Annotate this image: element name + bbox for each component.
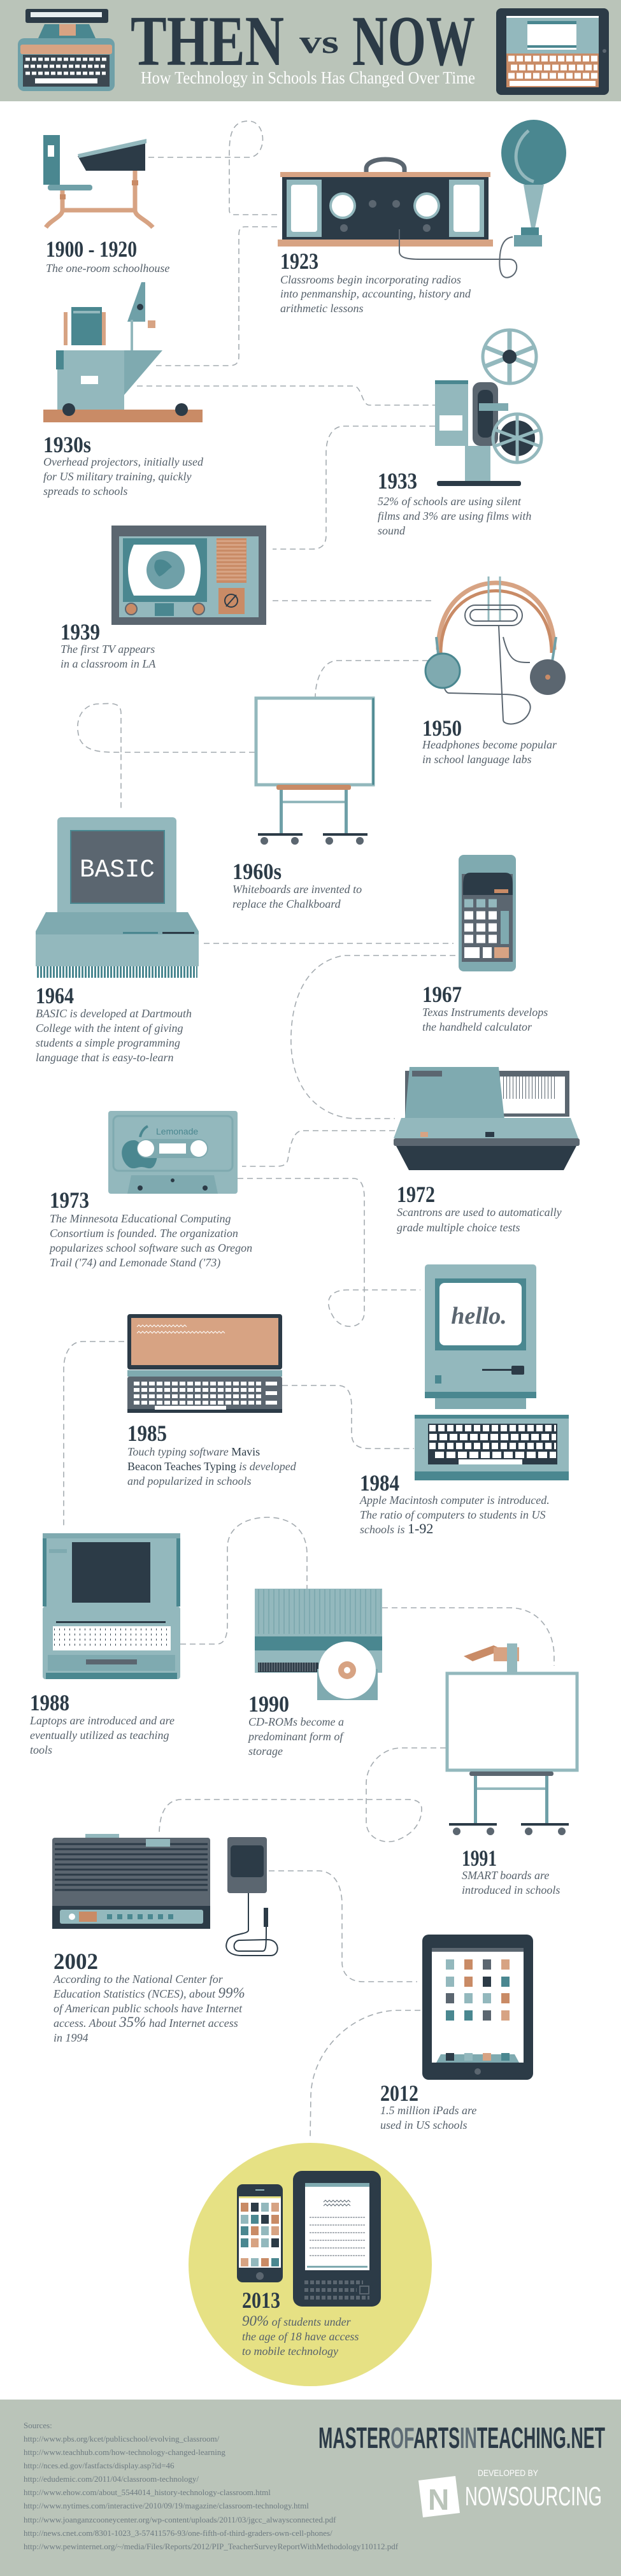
year 1967: 1967 bbox=[422, 982, 462, 1007]
icon: iPad bbox=[422, 1935, 533, 2080]
year 1991: 1991 bbox=[462, 1845, 497, 1871]
icon: 1988 laptop bbox=[43, 1533, 180, 1679]
year 1964: language that is easy-to-learn bbox=[36, 1051, 173, 1064]
year 1900-1920: The one-room schoolhouse bbox=[46, 262, 169, 275]
year 1973: The Minnesota Educational Computing bbox=[50, 1212, 231, 1225]
icon: tablet with keyboard bbox=[496, 8, 609, 95]
year 1933: 52% of schools are using silent bbox=[378, 495, 522, 508]
icon: film projector bbox=[435, 330, 541, 486]
icon: smartphone bbox=[237, 2184, 283, 2282]
sources list: http://nces.ed.gov/fastfacts/display.asp?id=46 bbox=[24, 2461, 175, 2470]
year 2012: 1.5 million iPads are bbox=[380, 2104, 476, 2117]
panel: 2013 mobile circle bbox=[189, 2143, 432, 2386]
icon: BASIC computer: BASIC bbox=[80, 856, 155, 885]
header band bbox=[0, 0, 621, 101]
title: THEN bbox=[131, 2, 284, 81]
sources list: http://www.joanganzcooneycenter.org/wp-content/uploads/2011/03/jgcc_alwaysconnected.pdf bbox=[24, 2515, 336, 2524]
year 1923: into penmanship, accounting, history and bbox=[280, 287, 471, 300]
year 1984: 1984 bbox=[360, 1470, 399, 1496]
connector paths bbox=[64, 121, 554, 2138]
year 1990: CD-ROMs become a bbox=[248, 1715, 344, 1728]
year 1939: in a classroom in LA bbox=[61, 657, 156, 670]
year 1950: Headphones become popular bbox=[422, 738, 557, 751]
year 2002: Education Statistics (NCES), about 99% bbox=[53, 1985, 245, 2001]
sources list: http://www.teachhub.com/how-technology-changed-learning bbox=[24, 2447, 225, 2457]
icon: whiteboard bbox=[256, 698, 373, 845]
icon: school desk bbox=[43, 135, 153, 227]
title bbox=[131, 2, 475, 81]
year 1960s: replace the Chalkboard bbox=[232, 898, 341, 910]
year 1985: Beacon Teaches Typing is developed bbox=[127, 1460, 297, 1473]
year 1967: the handheld calculator bbox=[422, 1020, 532, 1033]
sources list: Sources: bbox=[24, 2421, 52, 2430]
year 1972: Scantrons are used to automatically bbox=[397, 1206, 562, 1219]
year 1973: Trail ('74) and Lemonade Stand ('73) bbox=[50, 1256, 220, 1270]
year 1939 bbox=[61, 619, 156, 670]
year 1972: grade multiple choice tests bbox=[397, 1221, 520, 1234]
year 1930s: Overhead projectors, initially used bbox=[43, 455, 204, 468]
title: vs bbox=[299, 24, 339, 61]
subtitle: How Technology in Schools Has Changed Over Time bbox=[141, 68, 475, 87]
year 1930s: for US military training, quickly bbox=[43, 470, 191, 483]
year 1900-1920: 1900 - 1920 bbox=[46, 236, 137, 262]
logo: developed by nowsourcing: N bbox=[428, 2483, 449, 2516]
year 1990: predominant form of bbox=[247, 1730, 345, 1743]
year 1972: 1972 bbox=[397, 1182, 435, 1207]
year 1967 bbox=[422, 982, 548, 1033]
year 2012: 2012 bbox=[380, 2080, 418, 2106]
year 1973: 1973 bbox=[50, 1187, 89, 1213]
year 1985: and popularized in schools bbox=[127, 1475, 252, 1487]
year 2013: 2013 bbox=[242, 2287, 280, 2313]
year 1960s: Whiteboards are invented to bbox=[232, 883, 362, 896]
year 1964: students a simple programming bbox=[36, 1036, 180, 1049]
year 1984: Apple Macintosh computer is introduced. bbox=[359, 1494, 550, 1506]
year 1933: 1933 bbox=[378, 468, 417, 494]
year 1984: The ratio of computers to students in US bbox=[360, 1508, 545, 1521]
icon: e-reader bbox=[293, 2171, 381, 2307]
year 1939: 1939 bbox=[61, 619, 100, 645]
year 2002: According to the National Center for bbox=[53, 1973, 224, 1986]
year 1930s bbox=[43, 432, 204, 497]
year 1991: SMART boards are bbox=[462, 1869, 549, 1882]
year 1930s: spreads to schools bbox=[43, 485, 127, 497]
sources list bbox=[24, 2421, 399, 2551]
year 2002: 2002 bbox=[54, 1949, 98, 1974]
year 2002: in 1994 bbox=[54, 2031, 89, 2044]
footer band bbox=[0, 2400, 621, 2576]
icon: BASIC computer bbox=[36, 817, 199, 972]
sources list: http://www.nytimes.com/interactive/2010/09/19/magazine/classroom-technology.html bbox=[24, 2501, 309, 2510]
year 2013 bbox=[242, 2287, 359, 2358]
year 1988 bbox=[29, 1690, 175, 1756]
year 1988: 1988 bbox=[30, 1690, 69, 1715]
year 1988: tools bbox=[30, 1743, 52, 1756]
year 2013: the age of 18 have access bbox=[242, 2330, 359, 2343]
year 2002: access. About 35% had Internet access bbox=[54, 2014, 238, 2030]
year 1923: arithmetic lessons bbox=[280, 302, 363, 315]
year 2013: 90% of students under bbox=[242, 2313, 352, 2329]
year 1950: 1950 bbox=[422, 715, 462, 741]
title: NOW bbox=[352, 2, 475, 81]
icon: Apple Macintosh: hello. bbox=[451, 1303, 507, 1329]
icon: CD-ROM drive bbox=[255, 1589, 382, 1700]
year 1933: films and 3% are using films with bbox=[378, 510, 531, 522]
year 1933: sound bbox=[378, 524, 406, 537]
year 1939: The first TV appears bbox=[61, 643, 155, 655]
year 2013: to mobile technology bbox=[242, 2345, 338, 2358]
icon: headphones bbox=[425, 576, 566, 724]
year 1990 bbox=[247, 1691, 345, 1757]
icon: modem router bbox=[52, 1834, 278, 1956]
icon: Apple Macintosh bbox=[415, 1264, 569, 1480]
year 1930s: 1930s bbox=[43, 432, 91, 457]
icon: cassette tape bbox=[108, 1111, 238, 1194]
sources list: http://www.ehow.com/about_5544014_history-technology-classroom.html bbox=[24, 2487, 271, 2497]
year 1985: 1985 bbox=[127, 1420, 167, 1446]
icon: calculator bbox=[459, 855, 516, 971]
year 1973: popularizes school software such as Oregon bbox=[48, 1241, 252, 1254]
sources list: http://www.pbs.org/kcet/publicschool/evolving_classroom/ bbox=[24, 2434, 220, 2444]
year 1991 bbox=[462, 1845, 560, 1896]
year 1990: 1990 bbox=[248, 1691, 289, 1717]
icon: SMART board bbox=[447, 1643, 577, 1835]
icon: overhead projector bbox=[43, 282, 203, 422]
icon: cassette tape: Lemonade bbox=[156, 1126, 198, 1136]
year 1964 bbox=[36, 983, 192, 1064]
year 1960s bbox=[232, 859, 362, 910]
year 2002 bbox=[53, 1949, 245, 2044]
year 1900-1920 bbox=[46, 236, 169, 275]
logo: developed by nowsourcing: DEVELOPED BY bbox=[478, 2468, 539, 2478]
year 1964: 1964 bbox=[36, 983, 74, 1008]
year 2012 bbox=[380, 2080, 476, 2131]
year 2002: of American public schools have Internet bbox=[54, 2002, 243, 2015]
year 1990: storage bbox=[248, 1745, 283, 1757]
year 1984: schools is 1-92 bbox=[360, 1521, 433, 1536]
year 1960s: 1960s bbox=[232, 859, 282, 884]
year 1967: Texas Instruments develops bbox=[422, 1006, 548, 1019]
year 1964: College with the intent of giving bbox=[36, 1022, 183, 1034]
year 1950 bbox=[422, 715, 557, 766]
year 1988: eventually utilized as teaching bbox=[30, 1729, 169, 1742]
year 1988: Laptops are introduced and are bbox=[29, 1714, 175, 1727]
icon: radio with horn bbox=[278, 120, 566, 278]
year 1985: Touch typing software Mavis bbox=[127, 1445, 260, 1458]
year 1972 bbox=[397, 1182, 562, 1234]
year 1991: introduced in schools bbox=[462, 1884, 560, 1896]
logo: developed by nowsourcing bbox=[418, 2468, 602, 2517]
icon: 1985 computer bbox=[127, 1314, 282, 1413]
year 1950: in school language labs bbox=[422, 753, 531, 766]
sources list: http://edudemic.com/2011/04/classroom-technology/ bbox=[24, 2474, 199, 2484]
icon: vintage TV bbox=[111, 526, 266, 625]
year 1985 bbox=[127, 1420, 297, 1487]
icon: typewriter bbox=[18, 9, 115, 91]
year 1973: Consortium is founded. The organization bbox=[50, 1227, 238, 1240]
year 1923: Classrooms begin incorporating radios bbox=[280, 273, 461, 286]
year 1933 bbox=[378, 468, 531, 537]
sources list: http://news.cnet.com/8301-1023_3-57411576-93/one-fifth-of-third-graders-own-cell-phones/ bbox=[24, 2528, 332, 2538]
sources list: http://www.pewinternet.org/~/media/Files/Reports/2012/PIP_TeacherSurveyReportWithMethodology110112.pdf bbox=[24, 2542, 399, 2551]
year 1923 bbox=[280, 248, 471, 315]
year 1973 bbox=[48, 1187, 252, 1270]
year 2012: used in US schools bbox=[380, 2119, 468, 2131]
year 1923: 1923 bbox=[280, 248, 318, 274]
year 1964: BASIC is developed at Dartmouth bbox=[36, 1007, 192, 1020]
icon: scantron machine bbox=[394, 1067, 580, 1170]
year 1984 bbox=[359, 1470, 550, 1536]
